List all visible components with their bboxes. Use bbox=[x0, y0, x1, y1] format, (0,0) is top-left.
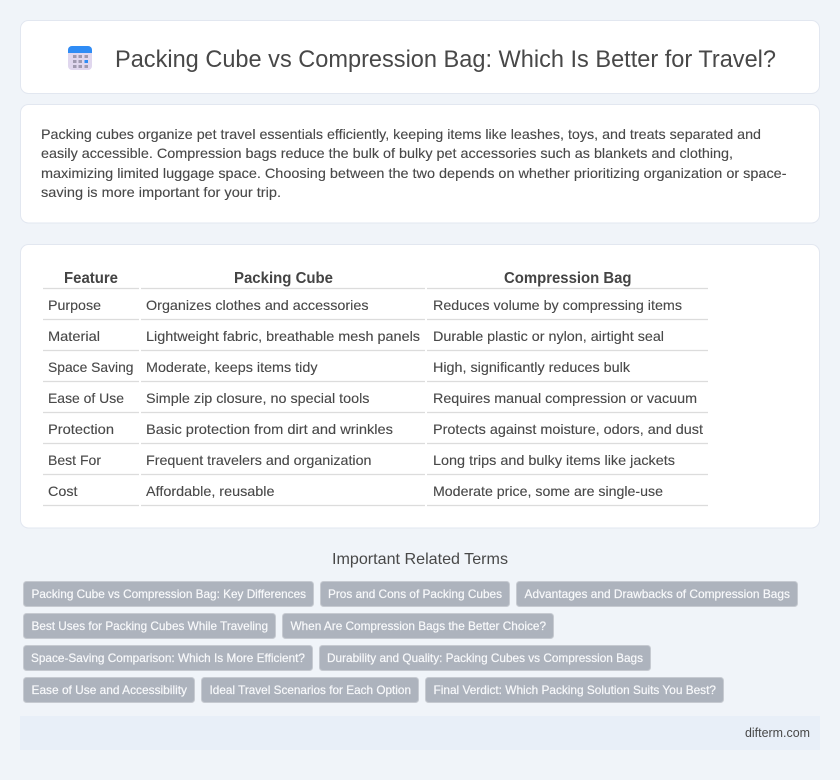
tag: Packing Cube vs Compression Bag: Key Differences bbox=[32, 587, 306, 601]
tag bbox=[24, 614, 276, 638]
tag: Space-Saving Comparison: Which Is More Efficient? bbox=[31, 651, 305, 665]
table row: purpose: Reduces volume by compressing items bbox=[433, 297, 682, 313]
table row: protection: Protection bbox=[48, 421, 114, 437]
panel: comparison table bbox=[20, 244, 820, 528]
table row: purpose bbox=[48, 297, 682, 313]
tag bbox=[516, 582, 798, 606]
panel: title card bbox=[20, 20, 820, 94]
table row: space saving bbox=[48, 359, 631, 375]
table row: protection: Protects against moisture, odors, and dust bbox=[433, 421, 703, 437]
text block: introduction paragraph: easily accessible. Compression bags reduce the bulk of bulky pet accessories such as blankets and clothing, bbox=[41, 145, 733, 161]
text block: introduction paragraph bbox=[41, 126, 787, 200]
tag: Pros and Cons of Packing Cubes bbox=[328, 587, 502, 601]
table row: cost: Cost bbox=[48, 483, 78, 499]
table row: material: Material bbox=[48, 328, 100, 344]
heading: important related terms: Important Related Terms bbox=[332, 551, 508, 568]
table row: protection: Basic protection from dirt and wrinkles bbox=[146, 421, 393, 437]
table row: ease of use: Simple zip closure, no special tools bbox=[146, 390, 370, 406]
table row: space saving: Space Saving bbox=[48, 359, 134, 375]
text block: introduction paragraph: Packing cubes organize pet travel essentials efficiently, keeping items like leashes, toys, and treats separated and bbox=[41, 126, 761, 142]
tag bbox=[282, 614, 554, 638]
tag: When Are Compression Bags the Better Choice? bbox=[290, 619, 546, 633]
table row: space saving: High, significantly reduces bulk bbox=[433, 359, 631, 375]
tag: Final Verdict: Which Packing Solution Suits You Best? bbox=[434, 683, 716, 697]
table row: best for bbox=[48, 452, 675, 468]
tag bbox=[320, 646, 650, 670]
table row: ease of use: Requires manual compression or vacuum bbox=[433, 390, 697, 406]
icon: calendar grid bbox=[68, 46, 92, 70]
table row: cost: Affordable, reusable bbox=[146, 483, 275, 499]
table row: best for: Best For bbox=[48, 452, 101, 468]
tag bbox=[202, 678, 418, 702]
tag bbox=[24, 678, 194, 702]
tag: Ease of Use and Accessibility bbox=[32, 683, 187, 697]
title: Packing Cube vs Compression Bag: Which Is Better for Travel? bbox=[115, 46, 776, 73]
text block: introduction paragraph: maximizing limited luggage space. Choosing between the two depends on whether prioritizing organization or space- bbox=[41, 165, 787, 181]
table row: ease of use bbox=[48, 390, 697, 406]
table row: cost: Moderate price, some are single-use bbox=[433, 483, 663, 499]
tag: Ideal Travel Scenarios for Each Option bbox=[210, 683, 411, 697]
tag: Advantages and Drawbacks of Compression Bags bbox=[524, 587, 790, 601]
tag list: related terms bbox=[24, 582, 798, 702]
table row: best for: Frequent travelers and organization bbox=[146, 452, 372, 468]
table header: Packing Cube bbox=[234, 270, 333, 287]
table header: Compression Bag bbox=[504, 270, 632, 287]
table row: purpose: Organizes clothes and accessories bbox=[146, 297, 368, 313]
panel: introduction bbox=[20, 104, 820, 223]
footer credit: difterm.com bbox=[745, 725, 810, 740]
tag: Durability and Quality: Packing Cubes vs Compression Bags bbox=[327, 651, 643, 665]
tag: Best Uses for Packing Cubes While Traveling bbox=[32, 619, 268, 633]
table row: material: Lightweight fabric, breathable mesh panels bbox=[146, 328, 420, 344]
tag bbox=[24, 646, 312, 670]
table row: material bbox=[48, 328, 664, 344]
table row: ease of use: Ease of Use bbox=[48, 390, 124, 406]
footer bbox=[20, 716, 820, 750]
table row: material: Durable plastic or nylon, airtight seal bbox=[433, 328, 664, 344]
text block: introduction paragraph: saving is more important for your trip. bbox=[41, 184, 281, 200]
tag bbox=[320, 582, 510, 606]
table row: best for: Long trips and bulky items like jackets bbox=[433, 452, 675, 468]
tag bbox=[24, 582, 314, 606]
table row: cost bbox=[48, 483, 663, 499]
table header bbox=[64, 270, 632, 287]
table row: space saving: Moderate, keeps items tidy bbox=[146, 359, 318, 375]
table row: purpose: Purpose bbox=[48, 297, 101, 313]
tag bbox=[426, 678, 724, 702]
table header: Feature bbox=[64, 270, 118, 287]
table row: protection bbox=[48, 421, 703, 437]
